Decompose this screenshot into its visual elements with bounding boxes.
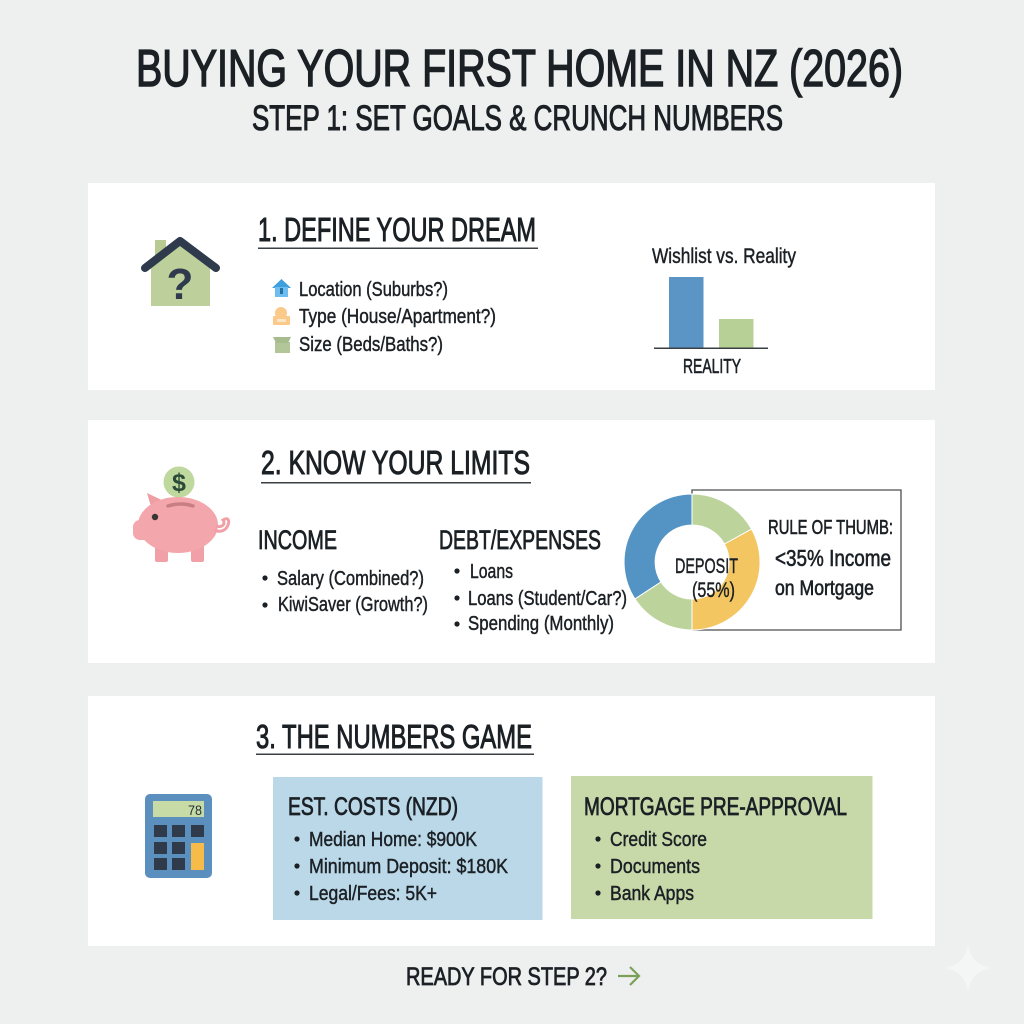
bar chart: wishlist vs reality	[652, 245, 796, 378]
income column: INCOME	[258, 525, 337, 555]
card: estimated costs: EST. COSTS (NZD)	[288, 793, 458, 821]
donut chart: deposit share: (55%)	[692, 579, 735, 602]
checklist: dream criteria: Type (House/Apartment?)	[299, 305, 496, 328]
icon: green box	[273, 337, 291, 353]
panel: the numbers game	[88, 696, 935, 946]
donut chart: deposit share	[624, 494, 760, 630]
card: mortgage pre-approval: Bank Apps	[610, 883, 694, 905]
callout: rule of thumb box: on Mortgage	[775, 577, 874, 600]
icon: house with question mark	[145, 240, 216, 309]
income column: KiwiSaver (Growth?)	[278, 594, 428, 616]
icon: calculator	[145, 794, 212, 878]
debt and expenses column: Loans	[470, 561, 513, 583]
icon: house with question mark: ?	[167, 260, 193, 309]
heading: know your limits: 2. KNOW YOUR LIMITS	[261, 444, 530, 481]
heading: the numbers game: 3. THE NUMBERS GAME	[256, 718, 532, 755]
arrow: next step	[618, 967, 639, 985]
card: mortgage pre-approval: MORTGAGE PRE-APPROVAL	[584, 793, 847, 821]
income column: Salary (Combined?)	[277, 568, 424, 590]
heading: define your dream: 1. DEFINE YOUR DREAM	[258, 211, 536, 248]
panel: define your dream	[88, 183, 935, 390]
checklist: dream criteria	[272, 278, 496, 356]
checklist: dream criteria: Location (Suburbs?)	[299, 278, 448, 301]
bar chart: wishlist vs reality: Wishlist vs. Reality	[652, 245, 796, 268]
icon: calculator: 78	[188, 802, 202, 818]
card: estimated costs	[273, 777, 542, 920]
callout: rule of thumb box	[692, 490, 901, 630]
card: mortgage pre-approval: Credit Score	[610, 829, 707, 851]
donut chart: deposit share: DEPOSIT	[675, 555, 738, 578]
debt and expenses column	[439, 525, 627, 635]
checklist: dream criteria: Size (Beds/Baths?)	[299, 333, 443, 356]
income column	[258, 525, 428, 616]
debt and expenses column: Spending (Monthly)	[468, 613, 614, 635]
card: mortgage pre-approval	[571, 776, 872, 919]
icon: blue home	[272, 279, 291, 297]
icon: piggy bank with coin: $	[172, 469, 186, 497]
bar chart: wishlist vs reality: REALITY	[683, 356, 741, 378]
subtitle: STEP 1: SET GOALS & CRUNCH NUMBERS	[252, 99, 783, 138]
card: estimated costs: Legal/Fees: 5K+	[309, 883, 437, 905]
icon: piggy bank with coin	[133, 466, 229, 562]
icon: orange building	[273, 307, 290, 325]
callout: rule of thumb box: RULE OF THUMB:	[768, 517, 893, 539]
card: estimated costs: Minimum Deposit: $180K	[309, 856, 509, 878]
debt and expenses column: Loans (Student/Car?)	[468, 588, 627, 610]
panel: know your limits	[88, 420, 935, 663]
callout: rule of thumb box: <35% Income	[775, 545, 891, 571]
debt and expenses column: DEBT/EXPENSES	[439, 525, 601, 555]
icon: sparkle watermark	[944, 943, 992, 993]
card: estimated costs: Median Home: $900K	[309, 829, 478, 851]
card: mortgage pre-approval: Documents	[610, 856, 700, 878]
footer call to action: READY FOR STEP 2?	[406, 963, 607, 991]
